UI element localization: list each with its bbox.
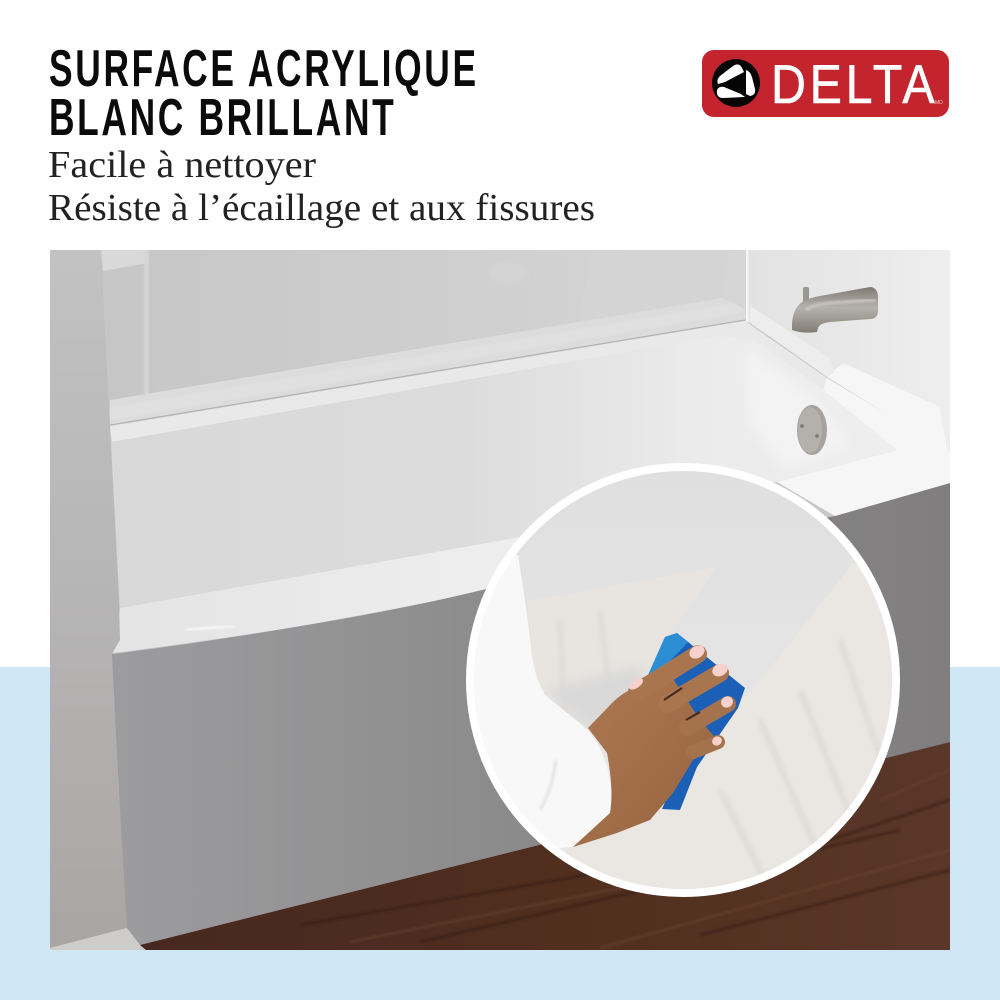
marble texture right of clean band: [566, 563, 892, 889]
subtitle text: Résiste à l’écaillage et aux fissures: [48, 187, 595, 229]
logo: Delta: [702, 50, 949, 117]
subtitle text: [48, 144, 595, 229]
tub front apron: [112, 483, 950, 945]
icon: Delta triangle mark: [712, 59, 760, 107]
wall ledge: [110, 298, 745, 425]
title: [49, 40, 476, 147]
back wall: [101, 250, 748, 394]
left column: [50, 250, 127, 948]
callout: inset circle with hand scrubbing: [440, 467, 910, 900]
icon: bath spout: [792, 287, 878, 333]
panel: bathtub photo: [50, 250, 950, 950]
subtitle text: Facile à nettoyer: [48, 144, 316, 186]
logo: Delta: MD: [935, 100, 943, 106]
shadow under hand: [554, 668, 642, 726]
tub deck right: [777, 378, 950, 516]
sleeve: [474, 555, 612, 848]
title: BLANC BRILLANT: [49, 89, 394, 147]
tub back rim: [110, 321, 827, 444]
fingernails: [627, 643, 735, 747]
icon: overflow drain: [797, 405, 827, 455]
tub front rim: [113, 537, 540, 653]
logo: Delta: DELTA: [771, 53, 935, 115]
tub interior: [111, 336, 897, 608]
sponge: [645, 633, 745, 810]
light blue background band: [0, 667, 1000, 1000]
marble texture left of clean band: [528, 567, 716, 740]
hand: [573, 654, 728, 847]
title: SURFACE ACRYLIQUE: [49, 40, 476, 98]
wood floor: [140, 742, 950, 950]
side wall: [746, 250, 950, 456]
